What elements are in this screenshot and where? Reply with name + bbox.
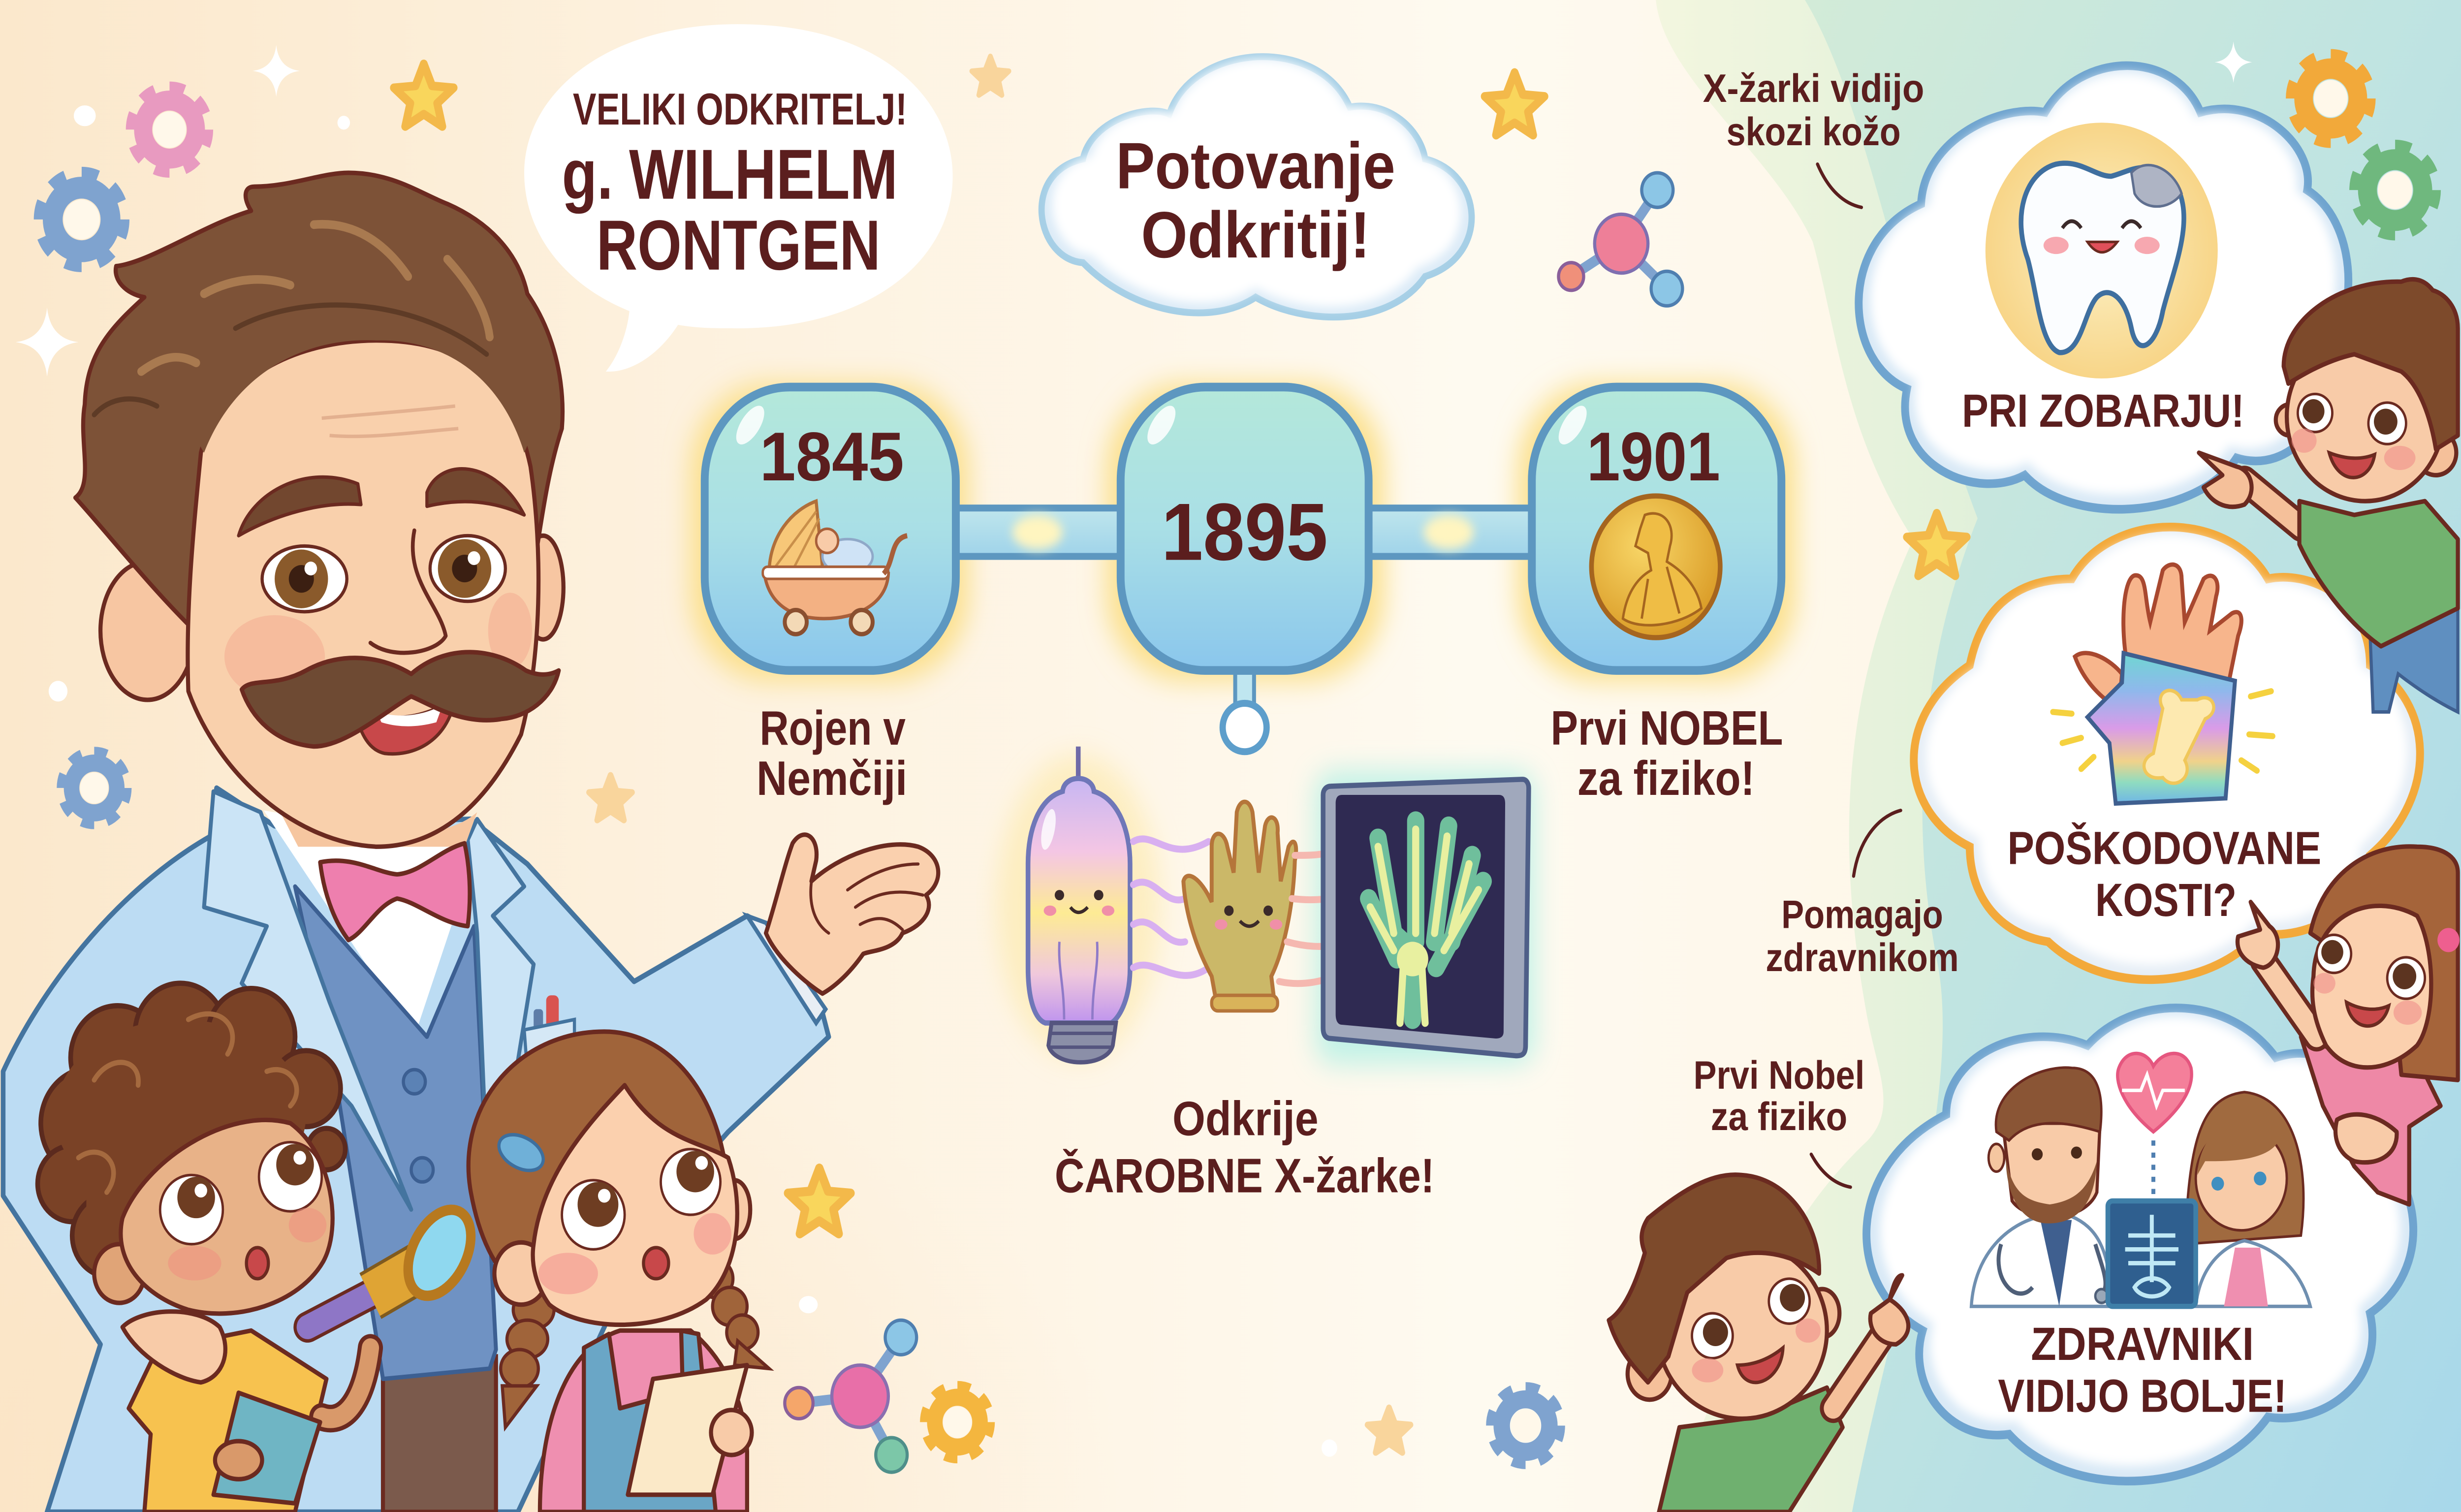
- speech bubble: [524, 24, 953, 372]
- neck: [267, 786, 477, 847]
- pill 1895: [1121, 387, 1369, 670]
- discovery caption: Odkrije: [1172, 1092, 1319, 1146]
- pill 1895: 1895: [1162, 487, 1328, 577]
- mouth: [355, 698, 455, 754]
- girl eyes: [562, 1149, 721, 1249]
- blush and smile: [1692, 1319, 1821, 1383]
- arm: [2244, 480, 2301, 527]
- left eye: [262, 546, 347, 612]
- hand: [2199, 453, 2252, 507]
- left lapel: [204, 791, 411, 1210]
- curly hair: [38, 983, 346, 1277]
- girl blush and mouth: [538, 1213, 731, 1294]
- notepad: [628, 1365, 747, 1495]
- discovery caption: [1055, 1092, 1435, 1202]
- nose: [371, 531, 446, 653]
- ears: [1628, 1289, 1839, 1400]
- connector sparks: [1012, 515, 1474, 549]
- trousers: [383, 1356, 496, 1512]
- notebook: [214, 1393, 320, 1503]
- face: [2287, 332, 2444, 501]
- hand: [2238, 902, 2278, 968]
- connector bars: [942, 508, 1546, 556]
- notebook hand: [215, 1441, 262, 1479]
- scientist Wilhelm Rontgen: [3, 173, 938, 1512]
- cloud label: KOSTI?: [2095, 874, 2237, 926]
- braid right: [698, 1260, 769, 1369]
- timeline label 1845: Rojen v: [759, 701, 906, 755]
- moustache: [242, 652, 559, 747]
- shirt: [2300, 501, 2458, 646]
- hair clip: [2437, 928, 2460, 952]
- man's hand on shoulder: [123, 1312, 225, 1383]
- x-ray discovery illustration: [997, 747, 1535, 1065]
- timeline label 1901: [1551, 701, 1783, 805]
- jeans: [2370, 596, 2458, 712]
- molecule bottom: [785, 1320, 916, 1472]
- pointing hand: [766, 835, 938, 994]
- telescope: [308, 1197, 484, 1327]
- eyebrows: [239, 469, 524, 536]
- cheeks: [224, 593, 532, 698]
- girl face: [533, 1085, 737, 1325]
- blush and smile: [2292, 429, 2416, 477]
- ears: [2276, 405, 2456, 475]
- hair: [2284, 279, 2458, 449]
- cloud label: [1998, 1318, 2287, 1422]
- left ear: [100, 562, 194, 700]
- hair fringe: [186, 228, 541, 453]
- eyes: [1692, 1279, 1810, 1358]
- boy arm: [322, 1348, 371, 1418]
- hair curl details: [78, 1014, 297, 1192]
- cloud label: [2007, 822, 2321, 926]
- cloud label: ZDRAVNIKI: [2031, 1318, 2254, 1370]
- pocket with pens: [524, 995, 574, 1071]
- second hand: [2335, 1114, 2397, 1163]
- cloud: dentist: [1859, 65, 2348, 509]
- speech text: RONTGEN: [597, 206, 881, 285]
- arm: [1833, 1334, 1884, 1408]
- title cloud: [1041, 57, 1472, 317]
- hair: [2310, 847, 2458, 1080]
- vest: [295, 886, 496, 1379]
- pill 1901: 1901: [1587, 418, 1720, 495]
- braid left: [501, 1291, 554, 1427]
- bulb glow: [997, 755, 1160, 1059]
- face: [2312, 906, 2431, 1068]
- girl with notepad: [469, 1032, 769, 1512]
- boy face: [121, 1120, 333, 1314]
- right ear: [523, 536, 564, 639]
- icon: male doctor: [1971, 1068, 2111, 1306]
- icon: glowing tube bulb: [1028, 747, 1130, 1062]
- icon: chest x-ray: [2108, 1201, 2196, 1306]
- note: help doctors: zdravnikom: [1766, 936, 1959, 980]
- eyes: [2298, 394, 2406, 444]
- hair highlights: [141, 224, 490, 372]
- eyes: [2317, 935, 2425, 999]
- rays from glove to panel: [1279, 838, 1381, 983]
- forehead lines: [322, 406, 458, 437]
- note: first Nobel: [1694, 1053, 1864, 1187]
- arm: [2263, 961, 2317, 1037]
- cloud: doctors: [1866, 1008, 2413, 1481]
- speech text: g. WILHELM: [562, 135, 898, 214]
- note: x-rays see through skin: skozi kožo: [1727, 110, 1901, 154]
- boy eyes: [160, 1142, 322, 1244]
- icon: hand in rainbow cast: [2053, 565, 2272, 804]
- molecule top: [1558, 173, 1682, 306]
- icon: pram: [763, 501, 907, 634]
- child pointing at dentist cloud: [2199, 279, 2458, 712]
- note: first Nobel: Prvi Nobel: [1694, 1053, 1864, 1098]
- pill 1845: [705, 387, 956, 670]
- timeline label 1901: Prvi NOBEL: [1551, 701, 1783, 755]
- timeline label 1845: [757, 701, 907, 805]
- speech text: [562, 84, 907, 285]
- yellow t-shirt: [128, 1330, 326, 1512]
- title: Potovanje: [1116, 129, 1395, 203]
- stem to node: [1223, 667, 1266, 752]
- cloud label: VIDIJO BOLJE!: [1998, 1370, 2287, 1422]
- pill 1901: [1532, 387, 1781, 670]
- hair: [1609, 1175, 1819, 1383]
- x-ray glow: [1315, 771, 1535, 1065]
- coat cuff: [747, 916, 825, 1023]
- note: help doctors: Pomagajo: [1781, 892, 1943, 937]
- overalls: [584, 1330, 716, 1512]
- girl ears: [494, 1180, 750, 1305]
- discovery caption: ČAROBNE X-žarke!: [1055, 1149, 1435, 1202]
- blush and smile: [2313, 973, 2422, 1026]
- right lapel: [468, 819, 534, 1234]
- boy with telescope: [38, 983, 484, 1512]
- child pointing at doctors cloud: [1609, 1175, 1908, 1512]
- title: [1116, 129, 1395, 272]
- notepad hand: [711, 1410, 752, 1455]
- tooth halo: [1986, 123, 2218, 378]
- timeline label 1901: za fiziko!: [1578, 751, 1755, 805]
- pill 1845: 1845: [759, 418, 904, 495]
- hand: [1870, 1275, 1908, 1344]
- cloud label: POŠKODOVANE: [2007, 822, 2321, 874]
- hair clip: [494, 1128, 548, 1178]
- timeline glow: [691, 383, 1796, 681]
- icon: x-ray panel: [1323, 779, 1529, 1056]
- bow tie: [320, 843, 470, 940]
- shirt: [2301, 1037, 2441, 1204]
- boy ear: [94, 1244, 144, 1303]
- pink sweater: [540, 1330, 747, 1512]
- icon: glove hand: [1183, 802, 1296, 1011]
- girl hair: [469, 1032, 728, 1288]
- child pointing at bones cloud: [2238, 847, 2460, 1204]
- x-ray hand bones: [1369, 821, 1483, 1023]
- icon: female doctor: [2185, 1092, 2310, 1306]
- face: [1657, 1242, 1827, 1418]
- timeline: [691, 383, 1796, 752]
- shirt: [264, 811, 477, 1037]
- note: x-rays see through skin: [1703, 66, 1924, 207]
- icon: smiling tooth: [2021, 163, 2184, 352]
- note: x-rays see through skin: X-žarki vidijo: [1703, 66, 1924, 111]
- hair: [75, 173, 563, 643]
- icon: heart with pulse: [2117, 1053, 2192, 1132]
- rays from bulb to glove: [1133, 839, 1208, 976]
- timeline label 1845: Nemčiji: [757, 751, 907, 805]
- note: help doctors: [1766, 811, 1959, 980]
- face: [188, 341, 538, 847]
- shirt: [1659, 1387, 1843, 1512]
- icon: nobel medal: [1591, 496, 1720, 638]
- lab coat: [3, 788, 829, 1512]
- speech text: VELIKI ODKRITELJ!: [573, 84, 907, 134]
- cloud label: PRI ZOBARJU!: [1962, 385, 2244, 437]
- title: Odkritij!: [1141, 199, 1370, 272]
- note: first Nobel: za fiziko: [1711, 1095, 1847, 1139]
- right eye: [430, 536, 505, 601]
- boy blush and mouth: [168, 1208, 326, 1281]
- vest buttons: [404, 1070, 433, 1182]
- cloud: injured bones: [1914, 527, 2420, 979]
